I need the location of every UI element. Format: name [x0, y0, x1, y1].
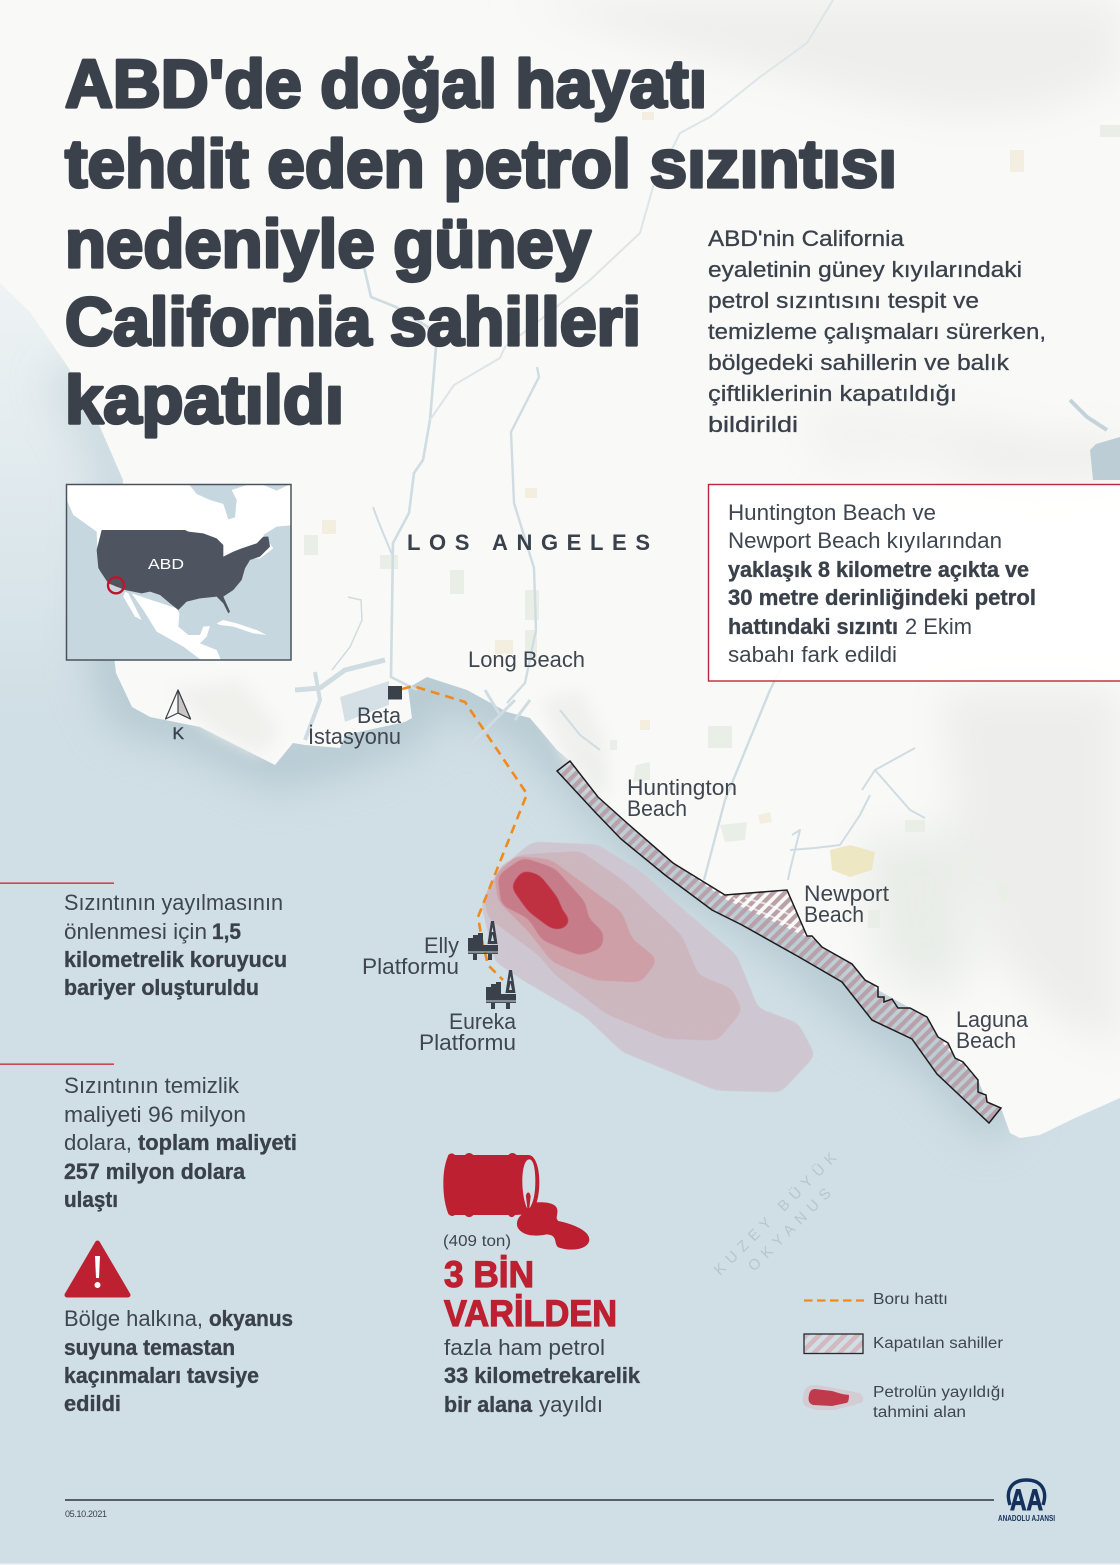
map labels: LOS ANGELES — [407, 530, 650, 555]
text block: spill figures: 33 kilometrekarelik — [444, 1363, 641, 1388]
terrain shading — [520, 0, 1120, 1050]
legend: tahmini alan — [873, 1404, 966, 1421]
map labels: Huntington — [627, 775, 737, 800]
icon: spilled oil barrel — [443, 1153, 589, 1250]
intro paragraph: eyaletinin güney kıyılarındaki — [708, 257, 1022, 282]
legend: Boru hattı — [873, 1291, 948, 1308]
map labels: Newport — [804, 881, 889, 906]
text block: spill figures: (409 ton) — [443, 1233, 511, 1250]
text block: cost: maliyeti 96 milyon — [64, 1102, 246, 1127]
intro paragraph: ABD'nin California — [708, 226, 905, 251]
text block: cost: dolara, — [64, 1130, 132, 1155]
map labels: Eureka — [449, 1009, 517, 1034]
map labels: Elly — [424, 933, 459, 958]
text block: warning: suyuna temastan — [64, 1335, 235, 1360]
icon: north arrow — [166, 690, 190, 743]
legend: Petrolün yayıldığı — [873, 1384, 1005, 1401]
logo: Anadolu Ajansi: AA — [1010, 1484, 1043, 1517]
map labels: İstasyonu — [308, 724, 401, 749]
text block: barrier — [0, 882, 287, 1000]
legend: Kapatılan sahiller — [873, 1335, 1003, 1352]
text block: barrier: kilometrelik koruyucu — [64, 947, 287, 972]
land mass — [0, 0, 1120, 1138]
title: tehdit eden petrol sızıntısı — [65, 126, 897, 202]
intro paragraph: bildirildi — [708, 412, 798, 437]
closed beaches hatched zone — [557, 761, 1001, 1123]
ocean label: OKYANUS — [745, 1182, 837, 1275]
text block: spill figures: 3 BİN — [444, 1254, 534, 1295]
text block: spill figures: fazla ham petrol — [444, 1335, 605, 1360]
intro paragraph — [708, 226, 1046, 437]
vegetation patches — [304, 125, 1120, 928]
text block: warning — [64, 1306, 293, 1416]
text block: spill figures: VARİLDEN — [444, 1293, 617, 1334]
icon: north arrow: K — [172, 724, 185, 743]
text block: cost: toplam maliyeti — [138, 1130, 297, 1155]
map labels — [308, 530, 1029, 1055]
text block: spill figures: bir alana — [444, 1392, 533, 1417]
text block: warning: Bölge halkına, — [64, 1306, 203, 1331]
text block: cost: ulaştı — [64, 1187, 118, 1212]
map labels: Beach — [627, 796, 687, 821]
panel: incident callout: hattındaki sızıntı — [728, 614, 898, 639]
logo: Anadolu Ajansi — [998, 1480, 1055, 1523]
panel: incident callout: 30 metre derinliğindeki petrol — [728, 585, 1036, 610]
map labels: Laguna — [956, 1007, 1029, 1032]
text block: cost: Sızıntının temizlik — [64, 1073, 240, 1098]
map labels: Platformu — [419, 1030, 516, 1055]
map labels: Beta — [357, 703, 402, 728]
panel: incident callout: sabahı fark edildi — [728, 642, 897, 667]
title: California sahilleri — [65, 284, 641, 360]
intro paragraph: bölgedeki sahillerin ve balık — [708, 350, 1010, 375]
port basins — [340, 681, 389, 722]
panel: incident callout — [708, 484, 1120, 681]
title: kapatıldı — [65, 362, 344, 438]
Beta station marker — [388, 686, 402, 700]
map labels: Platformu — [362, 954, 459, 979]
map labels: Beach — [956, 1028, 1016, 1053]
title: nedeniyle güney — [65, 206, 591, 282]
intro paragraph: çiftliklerinin kapatıldığı — [708, 381, 957, 406]
text block: warning: kaçınmaları tavsiye — [64, 1363, 259, 1388]
map labels: Beach — [804, 902, 864, 927]
text block: barrier: Sızıntının yayılmasının — [64, 890, 283, 915]
icon: Elly platform — [468, 921, 498, 960]
title: ABD'de doğal hayatı — [65, 46, 707, 122]
intro paragraph: petrol sızıntısını tespit ve — [708, 288, 979, 313]
text block: barrier: bariyer oluşturuldu — [64, 975, 259, 1000]
logo: Anadolu Ajansi: ANADOLU AJANSI — [998, 1513, 1055, 1523]
rivers and waterways — [295, 0, 1107, 880]
footer rule — [65, 1499, 994, 1501]
icon: warning triangle — [67, 1243, 128, 1295]
coastal shading — [68, 367, 1005, 1125]
text block: barrier: önlenmesi için — [64, 919, 207, 944]
text block: warning: okyanus — [209, 1306, 293, 1331]
title — [65, 46, 897, 438]
oil spill extent — [483, 844, 813, 1090]
panel: incident callout: Huntington Beach ve — [728, 500, 936, 525]
icon: Eureka platform — [486, 970, 516, 1009]
panel: locator inset map: ABD — [148, 556, 184, 573]
text block: cost — [0, 1064, 297, 1212]
map labels: Long Beach — [468, 647, 585, 672]
panel: locator inset map — [66, 483, 293, 662]
text block: spill figures — [443, 1233, 641, 1417]
text block: warning: edildi — [64, 1391, 121, 1416]
panel: incident callout: yaklaşık 8 kilometre açıkta ve — [728, 557, 1029, 582]
intro paragraph: temizleme çalışmaları sürerken, — [708, 319, 1046, 344]
panel: incident callout: 2 Ekim — [905, 614, 972, 639]
pipeline — [402, 686, 527, 980]
bottom edge strip — [0, 1564, 1120, 1565]
text block: cost: 257 milyon dolara — [64, 1159, 246, 1184]
text block: barrier: 1,5 — [212, 919, 241, 944]
panel: incident callout: Newport Beach kıyılarından — [728, 528, 1002, 553]
text block: spill figures: yayıldı — [539, 1392, 603, 1417]
legend — [803, 1291, 1005, 1421]
reservoir — [1090, 437, 1120, 480]
date: 05.10.2021 — [65, 1509, 107, 1519]
ocean label: KUZEY BÜYÜK — [710, 1146, 843, 1279]
